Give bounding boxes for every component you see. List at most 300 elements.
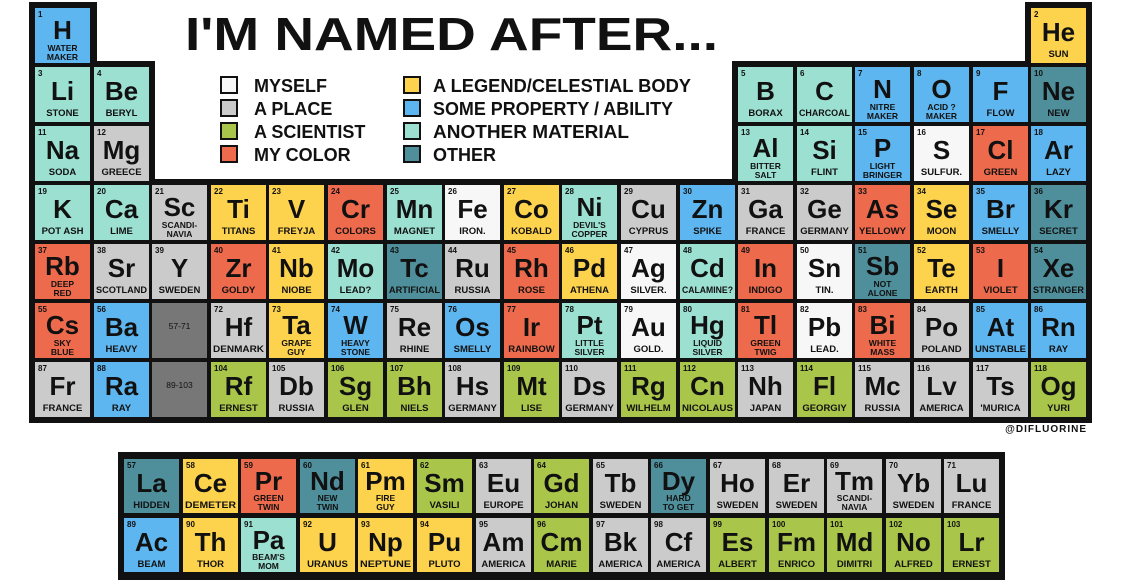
row 3: Na: [46, 135, 80, 165]
main table cells: Y: [171, 253, 188, 283]
main table cells: Hf: [225, 312, 253, 342]
main table cells: Cr: [341, 194, 370, 224]
main table cells: SILVER: [574, 347, 605, 357]
main table cells: GUY: [287, 347, 306, 357]
main table cells: GERMANY: [565, 403, 614, 414]
main table cells: Cu: [631, 194, 666, 224]
main table cells: Sr: [108, 253, 135, 283]
lanthanide and actinide cells: 71: [947, 461, 956, 470]
main table cells: At: [987, 312, 1015, 342]
main table cells: Sc: [164, 192, 195, 222]
row 6: [35, 303, 90, 358]
lanthanide and actinide cells: Pm: [365, 466, 406, 496]
lanthanide and actinide cells: 64: [537, 461, 546, 470]
main table cells: 42: [331, 246, 340, 255]
lanthanide and actinide cells: Cf: [665, 527, 693, 557]
lanthanide and actinide cells: Lr: [958, 527, 984, 557]
main table cells: W: [343, 310, 368, 340]
row 6: BLUE: [51, 347, 74, 357]
lanthanide and actinide cells: Pu: [428, 527, 461, 557]
lanthanide and actinide cells: Fm: [777, 527, 816, 557]
main table cells: 24: [331, 187, 340, 196]
lanthanide and actinide cells: TWIN: [317, 502, 338, 512]
main table cells: 8: [917, 69, 922, 78]
legend: A SCIENTIST: [254, 122, 365, 142]
main table cells: 85: [976, 305, 985, 314]
main table cells: SMELLY: [454, 344, 492, 355]
lanthanide and actinide cells: GUY: [376, 502, 395, 512]
main table cells: I: [997, 253, 1004, 283]
main table cells: COPPER: [572, 229, 607, 239]
row 3: 11: [38, 128, 47, 137]
main table cells: GOLD.: [633, 344, 664, 355]
row 2: 3: [38, 69, 43, 78]
lanthanide and actinide cells: 63: [479, 461, 488, 470]
main table cells: CYPRUS: [629, 226, 668, 237]
lanthanide and actinide cells: NEW: [318, 493, 338, 503]
lanthanide and actinide cells: Dy: [662, 466, 696, 496]
main table cells: 27: [507, 187, 516, 196]
main table cells: Og: [1040, 371, 1077, 401]
lanthanide and actinide cells: Tb: [605, 468, 636, 498]
main table cells: Cn: [690, 371, 725, 401]
lanthanide and actinide cells: 91: [244, 520, 253, 529]
main table cells: SUN: [1048, 49, 1069, 60]
lanthanide and actinide cells: MARIE: [546, 559, 577, 570]
lanthanide and actinide cells: ERNEST: [952, 559, 991, 570]
main table cells: 2: [1034, 10, 1039, 19]
main table cells: LIQUID: [693, 338, 722, 348]
main table cells: 5: [741, 69, 746, 78]
lanthanide and actinide cells: 62: [420, 461, 429, 470]
main table cells: B: [756, 76, 775, 106]
lanthanide and actinide cells: PLUTO: [428, 559, 461, 570]
main table cells: LAZY: [1046, 167, 1072, 178]
row 5: DEEP: [51, 279, 74, 289]
lanthanide and actinide cells: Pr: [255, 466, 282, 496]
lanthanide and actinide cells: URANUS: [307, 559, 348, 570]
title: I'M NAMED AFTER...: [185, 8, 718, 60]
main table cells: Ge: [807, 194, 842, 224]
row 1: WATER: [47, 43, 78, 53]
main table cells: Co: [514, 194, 549, 224]
main table cells: LISE: [521, 403, 542, 414]
legend: MY COLOR: [254, 145, 351, 165]
main table cells: F: [993, 76, 1008, 106]
lanthanide and actinide cells: 67: [713, 461, 722, 470]
main table cells: Ga: [748, 194, 783, 224]
main table cells: 84: [917, 305, 926, 314]
main table cells: DEVIL'S: [573, 220, 606, 230]
lanthanide and actinide cells: JOHAN: [545, 500, 578, 511]
lanthanide and actinide cells: 65: [596, 461, 605, 470]
lanthanide and actinide cells: Tm: [835, 466, 874, 496]
main table cells: 51: [858, 246, 867, 255]
main table cells: Rg: [631, 371, 666, 401]
main table cells: 109: [507, 364, 521, 373]
main table cells: MAKER: [867, 111, 898, 121]
main table cells: STRANGER: [1033, 285, 1084, 296]
main table cells: LIGHT: [870, 161, 896, 171]
lanthanide and actinide cells: SWEDEN: [893, 500, 934, 511]
lanthanide and actinide cells: Yb: [897, 468, 930, 498]
legend: MYSELF: [254, 76, 327, 96]
main table cells: Rf: [225, 371, 253, 401]
main table cells: TITANS: [222, 226, 255, 237]
main table cells: 41: [272, 246, 281, 255]
main table cells: SCANDI-: [162, 220, 197, 230]
lanthanide and actinide cells: 96: [537, 520, 546, 529]
legend: [221, 76, 691, 165]
main table cells: MASS: [870, 347, 895, 357]
main table cells: EARTH: [925, 285, 958, 296]
main table cells: 82: [800, 305, 809, 314]
main table cells: ROSE: [518, 285, 545, 296]
main table cells: 72: [214, 305, 223, 314]
row 7: 87: [38, 364, 47, 373]
main table cells: Bi: [870, 310, 896, 340]
row 4: POT ASH: [42, 226, 84, 237]
main table cells: 29: [624, 187, 633, 196]
main table cells: NOT: [874, 279, 892, 289]
main table cells: Tc: [400, 253, 429, 283]
row 6: 55: [38, 305, 47, 314]
main table cells: 80: [683, 305, 692, 314]
main table cells: 9: [976, 69, 981, 78]
actinides: BEAM: [138, 559, 166, 570]
main table cells: [35, 8, 1086, 417]
main table cells: 26: [448, 187, 457, 196]
row 1: MAKER: [47, 52, 78, 62]
lanthanide and actinide cells: SWEDEN: [776, 500, 817, 511]
lanthanide and actinide cells: 98: [654, 520, 663, 529]
main table cells: BITTER: [750, 161, 781, 171]
main table cells: NIELS: [401, 403, 428, 414]
main table cells: SECRET: [1039, 226, 1078, 237]
row 2: STONE: [46, 108, 79, 119]
main table cells: FLINT: [811, 167, 838, 178]
main table cells: Bh: [397, 371, 432, 401]
lanthanide and actinide cells: 70: [889, 461, 898, 470]
row 5: RED: [54, 288, 71, 298]
main table cells: 21: [155, 187, 164, 196]
lanthanide and actinide cells: MOM: [258, 561, 279, 571]
lanthanide and actinide cells: HARD: [666, 493, 691, 503]
credit: @DIFLUORINE: [1005, 424, 1087, 435]
main table cells: 89-103: [166, 380, 193, 390]
legend: OTHER: [433, 145, 496, 165]
lanthanide and actinide cells: 69: [830, 461, 839, 470]
main table cells: 12: [97, 128, 106, 137]
main table cells: 112: [683, 364, 696, 373]
lanthanide and actinide cells: 103: [947, 520, 961, 529]
main table cells: 43: [390, 246, 399, 255]
main table cells: GREECE: [101, 167, 142, 178]
main table cells: FRANCE: [746, 226, 785, 237]
main table cells: 'MURICA: [980, 403, 1021, 414]
lanthanide and actinide cells: 102: [889, 520, 903, 529]
main table cells: MAKER: [926, 111, 957, 121]
main table cells: RAY: [1049, 344, 1069, 355]
row 7: Fr: [50, 371, 76, 401]
main table cells: Rn: [1041, 312, 1076, 342]
main table cells: 108: [448, 364, 462, 373]
lanthanide and actinide cells: Pa: [253, 525, 285, 555]
lanthanide and actinide cells: 92: [303, 520, 312, 529]
main table cells: 111: [624, 364, 637, 373]
lanthanide and actinide cells: 68: [772, 461, 781, 470]
lanthanide and actinide cells: Es: [722, 527, 753, 557]
main table cells: SMELLY: [982, 226, 1020, 237]
main table cells: IRON.: [459, 226, 486, 237]
main table cells: 44: [448, 246, 457, 255]
lanthanide and actinide cells: 101: [830, 520, 844, 529]
main table cells: SCOTLAND: [96, 285, 147, 296]
row 5: [35, 244, 90, 299]
main table cells: 73: [272, 305, 281, 314]
row 4: K: [53, 194, 72, 224]
main table cells: Zn: [692, 194, 723, 224]
lanthanide and actinide cells: 99: [713, 520, 722, 529]
main table cells: Pb: [808, 312, 841, 342]
main table cells: Ti: [227, 194, 250, 224]
main table cells: 23: [272, 187, 281, 196]
main table cells: ACID ?: [927, 102, 956, 112]
lanthanide and actinide cells: No: [896, 527, 931, 557]
main table cells: 15: [858, 128, 867, 137]
main table cells: 34: [917, 187, 926, 196]
actinides: Ac: [135, 527, 168, 557]
lanthanide and actinide cells: AMERICA: [656, 559, 701, 570]
main table cells: GRAPE: [281, 338, 312, 348]
row 6: Cs: [46, 310, 79, 340]
main table cells: YURI: [1047, 403, 1070, 414]
row 2: Li: [51, 76, 74, 106]
main table cells: LIME: [110, 226, 133, 237]
main table cells: RUSSIA: [865, 403, 901, 414]
main table cells: NICOLAUS: [682, 403, 733, 414]
main table cells: Kr: [1044, 194, 1073, 224]
main table cells: BRINGER: [863, 170, 902, 180]
main table cells: FLOW: [987, 108, 1015, 119]
main table cells: 78: [565, 305, 574, 314]
main table cells: GOLDY: [222, 285, 256, 296]
main table cells: 45: [507, 246, 516, 255]
main table cells: Mo: [337, 253, 374, 283]
main table cells: Ni: [576, 192, 602, 222]
lanthanide and actinide cells: Gd: [543, 468, 580, 498]
main table cells: Ds: [573, 371, 606, 401]
main table cells: WILHELM: [626, 403, 671, 414]
main table cells: 116: [917, 364, 930, 373]
lanthanide and actinide cells: Cm: [541, 527, 582, 557]
main table cells: Nb: [279, 253, 314, 283]
main table cells: 48: [683, 246, 692, 255]
row 6: SKY: [54, 338, 72, 348]
row 1: H: [53, 15, 72, 45]
main table cells: 88: [97, 364, 106, 373]
lanthanide and actinide cells: AMERICA: [481, 559, 526, 570]
main table cells: KOBALD: [511, 226, 552, 237]
main table cells: COLORS: [335, 226, 376, 237]
main table cells: 32: [800, 187, 809, 196]
lanthanide and actinide cells: Lu: [956, 468, 987, 498]
main table cells: In: [754, 253, 777, 283]
main table cells: WHITE: [869, 338, 897, 348]
main table cells: 16: [917, 128, 926, 137]
main table cells: SILVER: [692, 347, 723, 357]
lanthanide and actinide cells: SCANDI-: [837, 493, 872, 503]
main table cells: 76: [448, 305, 457, 314]
main table cells: 105: [272, 364, 286, 373]
lanthanide and actinide cells: 100: [772, 520, 786, 529]
lanthanide and actinide cells: FRANCE: [952, 500, 991, 511]
main table cells: Mt: [516, 371, 547, 401]
main table cells: ERNEST: [219, 403, 258, 414]
main table cells: Db: [279, 371, 314, 401]
main table cells: CHARCOAL: [799, 108, 850, 119]
main table cells: 38: [97, 246, 106, 255]
main table cells: Ir: [523, 312, 540, 342]
lanthanide and actinide cells: FIRE: [376, 493, 396, 503]
main table cells: Ba: [105, 312, 139, 342]
main table cells: Be: [105, 76, 138, 106]
row 2: [35, 67, 90, 122]
main table cells: BERYL: [106, 108, 138, 119]
lanthanide and actinide cells: Th: [195, 527, 226, 557]
main table cells: Ts: [986, 371, 1015, 401]
lanthanide and actinide cells: Ho: [720, 468, 755, 498]
main table cells: Si: [812, 135, 837, 165]
lanthanide and actinide cells: ALBERT: [718, 559, 757, 570]
lanthanide and actinide cells: Np: [368, 527, 403, 557]
main table cells: ALONE: [868, 288, 898, 298]
main table cells: Po: [925, 312, 958, 342]
main table cells: GEORGIY: [802, 403, 847, 414]
lanthanide and actinide cells: 90: [186, 520, 195, 529]
lanthanide and actinide cells: GREEN: [253, 493, 284, 503]
lanthanide and actinide cells: TWIN: [258, 502, 279, 512]
main table cells: Nh: [748, 371, 783, 401]
lanthanides: [124, 459, 179, 513]
main table cells: 107: [390, 364, 404, 373]
main table cells: Ag: [631, 253, 666, 283]
lanthanide and actinide cells: 95: [479, 520, 488, 529]
main table cells: P: [874, 133, 891, 163]
main table cells: HEAVY: [341, 338, 370, 348]
main table cells: Rh: [514, 253, 549, 283]
main table cells: DENMARK: [213, 344, 264, 355]
main table cells: MOON: [927, 226, 956, 237]
main table cells: AMERICA: [919, 403, 964, 414]
main table cells: 30: [683, 187, 692, 196]
main table cells: SULFUR.: [921, 167, 962, 178]
main table cells: INDIGO: [749, 285, 782, 296]
main table cells: 40: [214, 246, 223, 255]
main table cells: 118: [1034, 364, 1047, 373]
main table cells: 20: [97, 187, 106, 196]
main table cells: Au: [631, 312, 666, 342]
row 3: SODA: [49, 167, 76, 178]
lanthanide and actinide cells: ENRICO: [778, 559, 815, 570]
main table cells: 25: [390, 187, 399, 196]
lanthanide and actinide cells: DEMETER: [185, 500, 236, 511]
lanthanide and actinide cells: 66: [654, 461, 663, 470]
lanthanides: 57: [127, 461, 136, 470]
main table cells: 36: [1034, 187, 1043, 196]
main table cells: GERMANY: [800, 226, 849, 237]
lanthanide and actinide cells: 60: [303, 461, 312, 470]
row 7: [35, 362, 90, 417]
main table cells: Hg: [690, 310, 725, 340]
main table cells: Cl: [988, 135, 1014, 165]
main table cells: 14: [800, 128, 809, 137]
main table cells: LEAD.: [810, 344, 839, 355]
main table cells: 17: [976, 128, 985, 137]
main table cells: Pt: [576, 310, 603, 340]
main table cells: NIOBE: [281, 285, 312, 296]
main table cells: Hs: [456, 371, 489, 401]
lanthanide and actinide cells: DIMITRI: [837, 559, 872, 570]
main table cells: Br: [986, 194, 1015, 224]
main table cells: 53: [976, 246, 985, 255]
main table cells: TWIG: [754, 347, 777, 357]
main table cells: V: [288, 194, 306, 224]
main table cells: Sg: [339, 371, 372, 401]
main table cells: 110: [565, 364, 578, 373]
main table cells: 49: [741, 246, 750, 255]
row 5: 37: [38, 246, 47, 255]
main table cells: 57-71: [169, 321, 191, 331]
main table cells: 104: [214, 364, 228, 373]
main table cells: LEAD?: [340, 285, 372, 296]
main table cells: 10: [1034, 69, 1043, 78]
main table cells: Sb: [866, 251, 899, 281]
main table cells: JAPAN: [750, 403, 781, 414]
lanthanide and actinide cells: Bk: [604, 527, 638, 557]
main table frame: [29, 2, 1092, 423]
main table cells: RHINE: [400, 344, 429, 355]
lanthanide and actinide cells: Md: [836, 527, 873, 557]
legend: A LEGEND/CELESTIAL BODY: [433, 76, 691, 96]
main table cells: 86: [1034, 305, 1043, 314]
lanthanide and actinide cells: EUROPE: [483, 500, 524, 511]
lanthanide and actinide cells: BEAM'S: [252, 552, 285, 562]
lanthanide and actinide cells: ALFRED: [894, 559, 933, 570]
main table cells: NEW: [1047, 108, 1070, 119]
main table cells: NAVIA: [167, 229, 192, 239]
main table cells: Sn: [808, 253, 841, 283]
main table cells: 83: [858, 305, 867, 314]
main table cells: 77: [507, 305, 516, 314]
main table cells: 13: [741, 128, 750, 137]
main table cells: Ne: [1042, 76, 1075, 106]
lanthanide/actinide frame: [118, 452, 1005, 580]
main table cells: Tl: [754, 310, 777, 340]
row 3: [35, 126, 90, 181]
lanthanide and actinide cells: U: [318, 527, 337, 557]
main table cells: Ar: [1044, 135, 1073, 165]
lanthanide and actinide cells: AMERICA: [598, 559, 643, 570]
main table cells: RAY: [112, 403, 132, 414]
row 7: FRANCE: [43, 403, 82, 414]
main table cells: 39: [155, 246, 164, 255]
main table cells: CALAMINE?: [682, 285, 733, 296]
lanthanide and actinide cells: THOR: [197, 559, 224, 570]
main table cells: 33: [858, 187, 867, 196]
main table cells: 113: [741, 364, 754, 373]
main table cells: ARTIFICIAL: [389, 285, 440, 296]
